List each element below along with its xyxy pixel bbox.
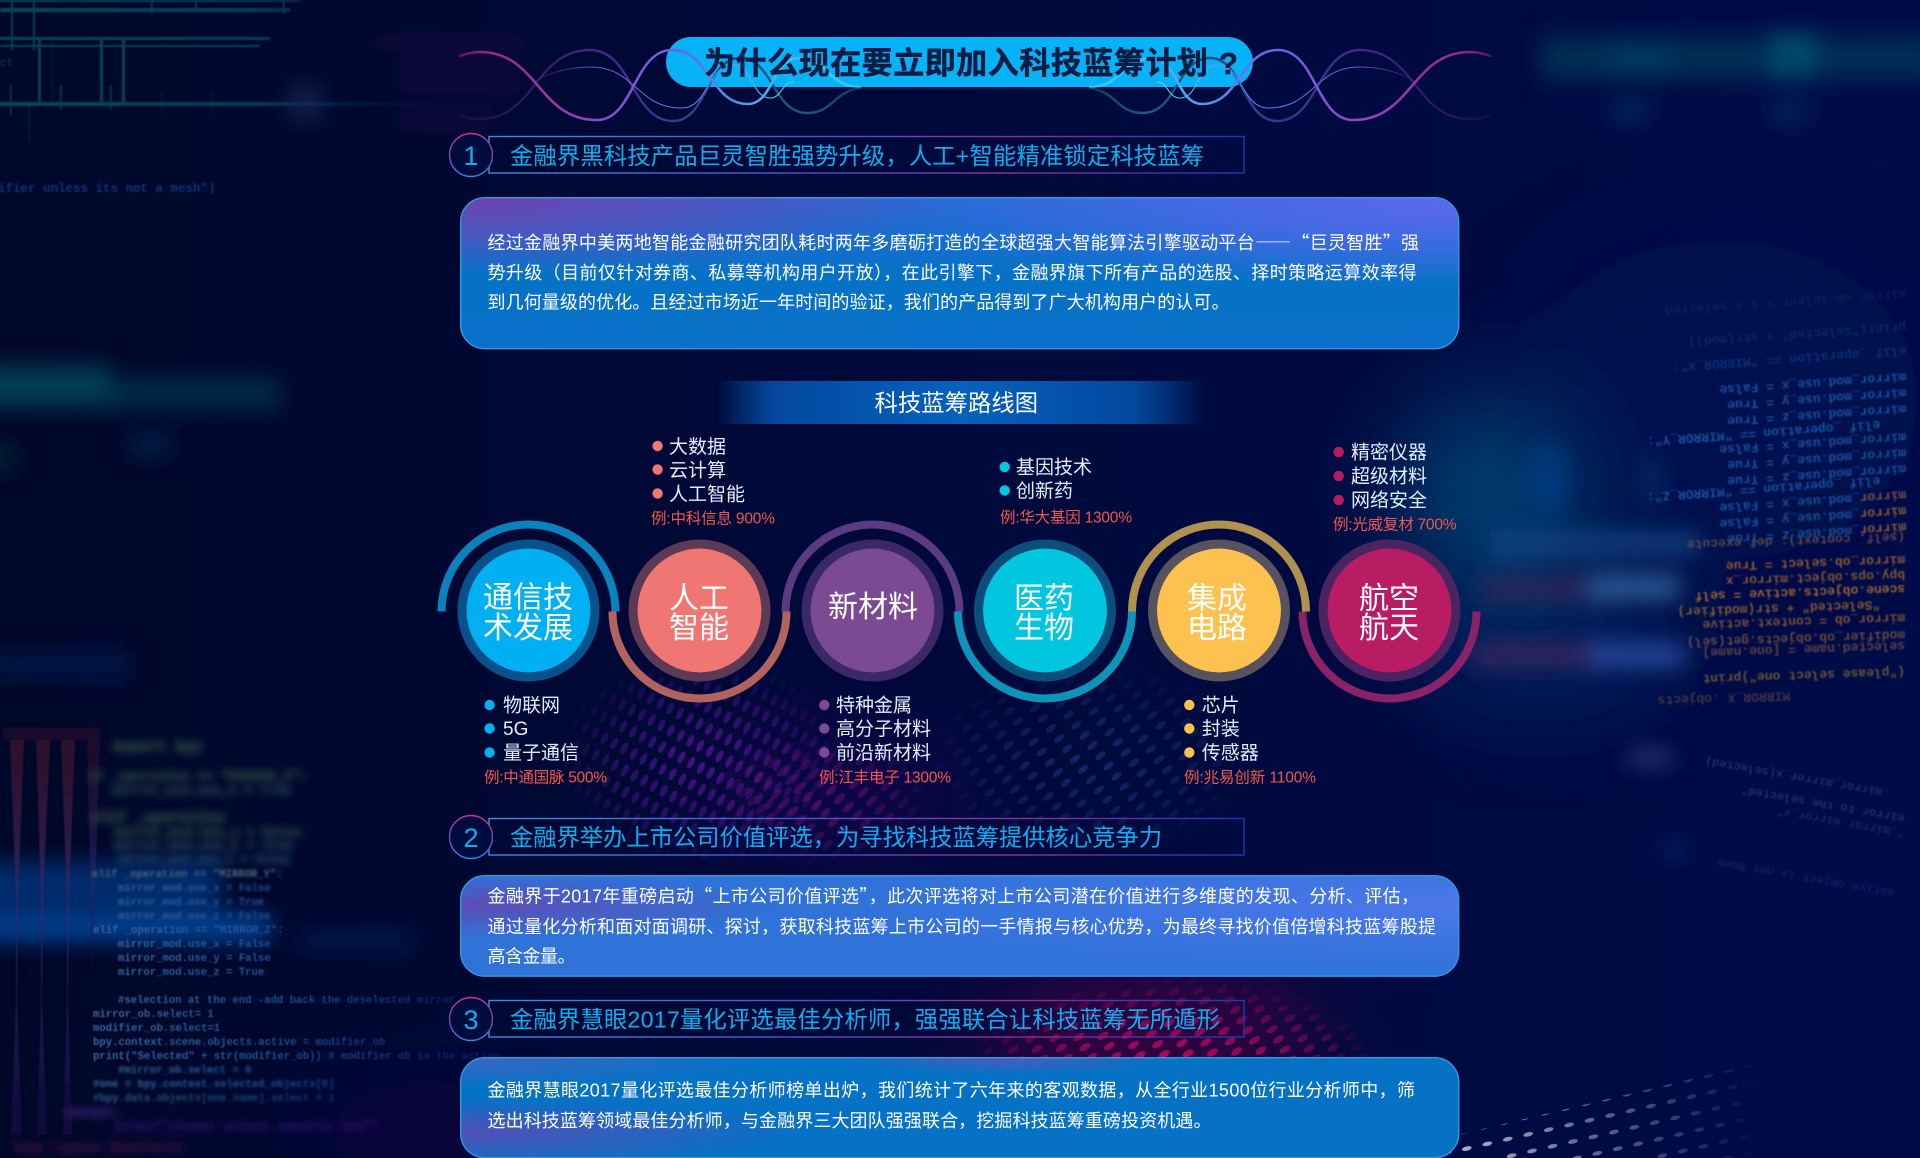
background: mirrored code right orange (1657, 529, 1905, 708)
number badge 2: 2 (463, 823, 479, 853)
node: 人工智能 (612, 544, 786, 699)
list: 航空航天 items (1333, 442, 1457, 534)
background: mirrored code right lower: active_object is not None (1716, 855, 1896, 900)
background: magenta dots (716, 738, 926, 862)
background: code text heavy blur (14, 739, 379, 1157)
roadmap heading banner: 科技蓝筹路线图 (874, 390, 1038, 416)
background: pink dots (980, 980, 1369, 1057)
heading text 1: 金融界黑科技产品巨灵智胜强势升级，人工+智能精准锁定科技蓝筹 (510, 143, 1204, 169)
heading text 3: 金融界慧眼2017量化评选最佳分析师，强强联合让科技蓝筹无所遁形 (510, 1006, 1220, 1032)
list: 新材料 items: 例:江丰电子 1300% (819, 768, 951, 786)
description text 3 (488, 1080, 1415, 1131)
node: 医药生物 (958, 544, 1132, 699)
number badge 3 (450, 998, 492, 1040)
background: mirrored code right orange: "Selected" + str(modifier) (1677, 597, 1880, 619)
background: right blurred bands (1470, 444, 1700, 854)
list: 新材料 items: 前沿新材料 (836, 742, 931, 764)
background: purple dots (564, 666, 834, 859)
background: left teal band (0, 365, 280, 471)
list: 通信技术发展 items: 量子通信 (503, 742, 579, 764)
background: code text heavy blur: import bpy (112, 739, 202, 756)
background: mirrored code right blue: mirror_mod.use_z = True (1727, 519, 1907, 547)
list: 人工智能 items: 例:中科信息 900% (651, 510, 775, 528)
list: 人工智能 items (651, 436, 775, 528)
description text 3: 选出科技蓝筹领域最佳分析师，与金融界三大团队强强联合，挖掘科技蓝筹重磅投资机遇。 (488, 1111, 1212, 1131)
background: mirrored code right orange: (self, context): def execute (1686, 529, 1905, 552)
background: code text heavy blur: mirror_mod.use_x = True (112, 783, 292, 798)
description text 2 (488, 882, 1436, 966)
panel: section 1 description (461, 198, 1459, 349)
background: code text heavy blur: if _operation == "MIRROR_X": (88, 769, 306, 784)
description text 2: 金融界于2017年重磅启动“上市公司价值评选”，此次评选将对上市公司潜在价值进行多维度的发现、分析、评估， (488, 882, 1419, 908)
background: code text sharp: mirror_mod.use_x = False (118, 939, 271, 951)
background: code text medium blur: #mirror_ob.select = 0 (118, 1065, 252, 1077)
background: mirrored code right blue: elif _operation == "MIRROR_Y": (1646, 417, 1881, 448)
background: code text heavy blur: mirror_mod.use_y = True (114, 838, 294, 853)
panel: section 3 description (461, 1058, 1459, 1158)
background: code text medium blur: mirror_mod.use_z = False (118, 911, 271, 923)
list: 集成电路 items: 例:兆易创新 1100% (1184, 768, 1316, 786)
list: 通信技术发展 items: 例:中通国脉 500% (484, 768, 607, 786)
list: 人工智能 items: 云计算 (669, 460, 726, 482)
node: 航空航天 (1302, 544, 1476, 699)
list: 医药生物 items: 基因技术 (1016, 456, 1092, 478)
roadmap heading banner (716, 381, 1205, 424)
background: star glow (285, 81, 325, 125)
background: mirrored code right orange: MIRROR_X .objects (1657, 688, 1790, 708)
background: mirrored code right orange: mirror_ob.select = True (1725, 552, 1905, 573)
background: code text sharp: mirror_mod.use_y = False (118, 953, 271, 965)
node: 通信技术发展 (442, 524, 616, 677)
background: left blue band (0, 650, 410, 950)
background: code text medium blur: #one = bpy.context.selected_objects[0] (93, 1079, 335, 1091)
background: mirrored code right lower: .mirror_mirror_x(selected) (1704, 754, 1891, 800)
background: mirrored code right lower: ".mirror_mirror_x" (1776, 804, 1906, 840)
node: 集成电路: 电路 (1187, 612, 1247, 645)
background: mirrored code right orange: modifier_ob.objects.get(sel) (1687, 627, 1905, 650)
background: code text sharp: bpy.context.scene.objects.active = modifier_ob (93, 1037, 385, 1049)
title text: 为什么现在要立即加入科技蓝筹计划 (704, 46, 1208, 81)
background: blue dots (948, 675, 1233, 846)
list: 人工智能 items: 人工智能 (669, 484, 745, 506)
node: 人工智能: 人工 (669, 582, 729, 616)
background: code text heavy blur: mirror_mod.use_x = False (114, 825, 301, 840)
background: blurred code fragment left (0, 58, 216, 196)
title text: ? (1219, 46, 1238, 81)
list: 集成电路 items: 芯片 (1202, 694, 1240, 716)
background: mirrored code right orange: scene.objects.active = self (1694, 581, 1905, 603)
background: mirrored code right orange: ("please select one")print (1702, 664, 1905, 686)
background: mirrored code right blue: mirror_mod.use_y = True (1727, 445, 1907, 473)
waves: left and right (460, 50, 1490, 121)
number badge 1 (450, 134, 492, 176)
node: 通信技术发展: 通信技 (483, 582, 573, 614)
background: blurred code fragment left: ifier unless its not a mesh") (0, 182, 216, 196)
background: top-left grid lines (0, 0, 430, 141)
number badge 1: 1 (463, 141, 479, 171)
list: 医药生物 items: 创新药 (1016, 480, 1073, 502)
list: 集成电路 items: 传感器 (1202, 742, 1259, 764)
background: code text sharp: modifier_ob.select=1 (93, 1023, 220, 1035)
background: code text sharp: mirror_mod.use_z = True (118, 967, 264, 979)
node: 人工智能: 智能 (669, 612, 729, 645)
node: 通信技术发展: 术发展 (483, 612, 573, 645)
background: mirrored code right lower: mirror to the selected" (1740, 782, 1906, 825)
background: mirrored code right blue: mirror_mod.use_x = False (1719, 487, 1907, 515)
background: top blurred pink text (376, 34, 526, 132)
description text 1: 到几何量级的优化。且经过市场近一年时间的验证，我们的产品得到了广大机构用户的认可。 (488, 293, 1230, 313)
background: mirrored code right blue: elif _operation == "MIRROR_Z": (1646, 473, 1881, 504)
list: 航空航天 items: 例:光威复材 700% (1333, 516, 1457, 534)
section 2 heading (450, 816, 1244, 858)
background: mirrored code right blue: mirror_mod.use_z = True (1727, 461, 1907, 489)
background: code text medium blur: mirror_mod.use_y = True (118, 897, 264, 909)
list: 航空航天 items: 超级材料 (1351, 466, 1427, 488)
node: 集成电路 (1132, 524, 1306, 677)
list: 通信技术发展 items (484, 694, 607, 786)
background: right wash glow (290, 240, 1920, 1158)
list: 航空航天 items: 网络安全 (1351, 490, 1427, 512)
node: 新材料: 新材料 (828, 591, 918, 624)
background: code text sharp (93, 925, 500, 1063)
background: code text sharp: print("Selected" + str(modifier_ob)) # modifier ob is the active (93, 1051, 500, 1063)
background: mirrored code right blue: mirror_mod.use_z = True (1727, 401, 1907, 429)
node: 航空航天: 航天 (1359, 612, 1419, 645)
list: 通信技术发展 items: 5G (503, 719, 528, 740)
number badge 3: 3 (463, 1005, 479, 1035)
background: mirrored code right orange: bpy.ops.object.mirror_x (1725, 567, 1905, 588)
background: code text heavy blur: elif _operation (90, 810, 225, 827)
panel: section 2 description (461, 876, 1459, 976)
list: 新材料 items (819, 694, 951, 786)
node: 医药生物: 医药 (1014, 582, 1074, 616)
background: red spikes (3, 728, 101, 1135)
background: mirrored code right orange: selected.name = [one.name] (1702, 638, 1905, 660)
background: mirrored code right blue (1646, 286, 1907, 547)
background: mirrored code right blue: print("Selected" + str(mod)) (1688, 319, 1907, 349)
description text 2: 通过量化分析和面对面调研、探讨，获取科技蓝筹上市公司的一手情报与核心优势，为最终寻找价值倍增科技蓝筹股提 (488, 917, 1436, 937)
background: mirrored code right blue: mirror_mod.use_y = True (1727, 385, 1907, 413)
background: white dots (1450, 1066, 1746, 1158)
background: code text medium blur: #bpy.data.objects[one.name].select = 1 (93, 1093, 335, 1105)
background: mirrored code right orange: mirror_ob = context.active (1702, 610, 1905, 632)
list: 人工智能 items: 大数据 (669, 436, 726, 458)
heading text 2: 金融界举办上市公司价值评选，为寻找科技蓝筹提供核心竞争力 (510, 824, 1162, 850)
roadmap diagram (442, 436, 1476, 786)
background: mirrored code right blue: mirror_mod.use_x = False (1719, 369, 1907, 397)
description text 1: 经过金融界中美两地智能金融研究团队耗时两年多磨砺打造的全球超强大智能算法引擎驱动平台——“巨灵智胜”强 (488, 229, 1419, 255)
description text 3: 金融界慧眼2017量化评选最佳分析师榜单出炉，我们统计了六年来的客观数据，从全行业1500位行业分析师中，筛 (488, 1080, 1415, 1100)
background: code text heavy blur: print("please select exactly two") (114, 1119, 379, 1134)
list: 医药生物 items: 例:华大基因 1300% (1000, 508, 1132, 526)
node: 医药生物: 生物 (1014, 612, 1074, 645)
list: 通信技术发展 items: 物联网 (503, 694, 560, 716)
background: code text sharp: #selection at the end -add back the deselected mirror (118, 995, 455, 1007)
node: 新材料 (786, 524, 960, 677)
section 3 heading (450, 998, 1244, 1040)
list: 航空航天 items: 精密仪器 (1351, 442, 1427, 464)
background: blurred code fragment left: ct (0, 58, 13, 70)
title pill (460, 37, 1490, 121)
background: mirrored code right blue: elif _operation == "MIRROR_X": (1672, 343, 1907, 374)
background: code text heavy blur: bpy.types.Operator (14, 1139, 187, 1157)
node: 航空航天: 航空 (1359, 582, 1419, 616)
list: 医药生物 items (1000, 456, 1132, 526)
background: mirrored code right lower (1704, 754, 1906, 900)
background: code text sharp: mirror_ob.select= 1 (93, 1009, 214, 1021)
number badge 2 (450, 816, 492, 858)
description text 1: 势升级（目前仅针对券商、私募等机构用户开放），在此引擎下，金融界旗下所有产品的选股、择时策略运算效率得 (488, 263, 1416, 283)
background: mirrored code right blue: mirror_ob.select = 0 # selected (1664, 286, 1907, 318)
list: 新材料 items: 高分子材料 (836, 718, 931, 740)
list: 新材料 items: 特种金属 (836, 694, 912, 716)
background: code text medium blur (92, 869, 335, 1105)
description text 2: 高含金量。 (488, 946, 576, 966)
background: code text sharp: elif _operation == "MIRROR_Z": (93, 925, 284, 937)
background: code text heavy blur: except: (65, 1105, 120, 1120)
list: 集成电路 items: 封装 (1202, 718, 1240, 740)
list: 集成电路 items (1184, 694, 1316, 786)
background: code text medium blur: mirror_mod.use_x = False (118, 883, 271, 895)
background: mirrored code right blue: mirror_mod.use_x = False (1719, 429, 1907, 457)
background: top-right teal blur (1540, 32, 1920, 124)
node: 集成电路: 集成 (1187, 582, 1247, 616)
background: code text medium blur: elif _operation == "MIRROR_Y": (92, 869, 283, 881)
background: mirrored code right blue: mirror_mod.use_y = False (1719, 503, 1907, 531)
description text 1 (488, 229, 1419, 313)
background: code text heavy blur: mirror_mod.use_z = False (118, 853, 291, 867)
section 1 heading (450, 134, 1244, 176)
